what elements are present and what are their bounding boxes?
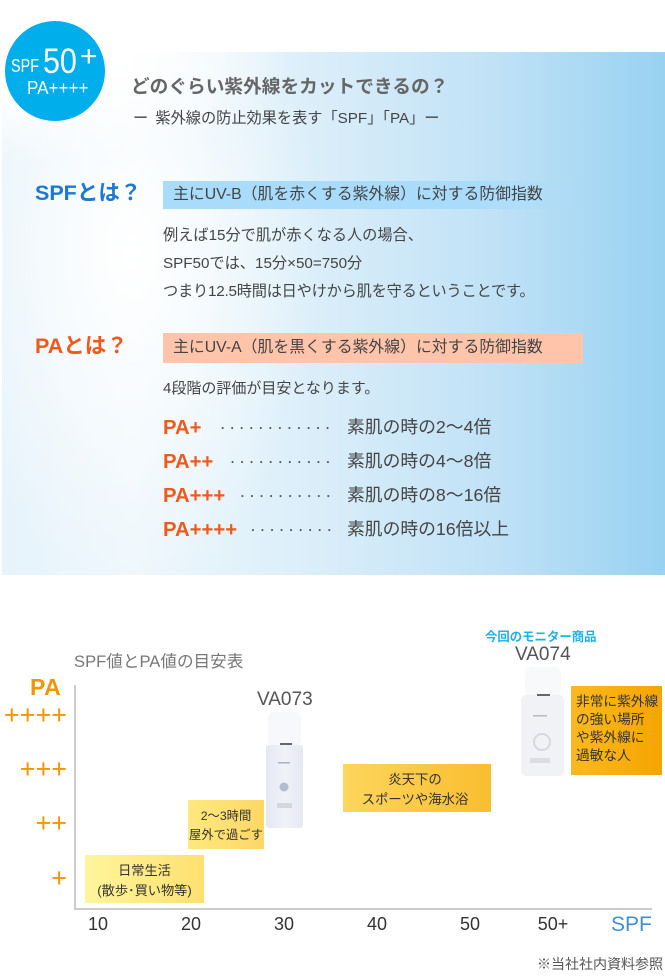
text: SPF explanation: つまり12.5時間は日やけから肌を守るということです。 xyxy=(163,283,534,300)
band: PA definition: 主にUV-A（肌を黒くする紫外線）に対する防御指数 xyxy=(173,339,543,356)
row: PA++ xyxy=(163,451,491,473)
badge: SPF 50+ PA++++: + xyxy=(80,40,98,73)
band: PA definition xyxy=(163,333,583,363)
axis ticks: SPF values: 50+ xyxy=(538,914,568,934)
box: strong UV: や紫外線に xyxy=(576,730,644,745)
box: strong UV xyxy=(571,686,662,775)
box: 2-3 hours outdoors xyxy=(188,800,264,849)
box: daily life: (散歩･買い物等) xyxy=(97,883,192,898)
axis ticks: PA levels: ++ xyxy=(35,808,67,838)
title: どのぐらい紫外線をカットできるの？ xyxy=(131,76,448,97)
axis ticks: PA levels: +++ xyxy=(20,754,67,784)
box: 2-3 hours outdoors: 屋外で過ごす xyxy=(189,828,263,842)
box: 2-3 hours outdoors: 2〜3時間 xyxy=(201,809,251,823)
axis ticks: PA levels xyxy=(4,700,67,893)
band: SPF definition xyxy=(163,181,583,209)
box: daily life xyxy=(85,855,204,903)
box: sports and beach: スポーツや海水浴 xyxy=(362,792,468,807)
panel: sky background xyxy=(2,52,665,575)
text: SPF explanation xyxy=(163,226,534,300)
axis ticks: SPF values: 50 xyxy=(460,914,480,934)
text: PA explanation: 4段階の評価が目安となります。 xyxy=(163,380,379,397)
label: VA073: VA073 xyxy=(257,689,313,710)
label: VA074: VA074 xyxy=(515,644,571,665)
badge: SPF 50+ PA++++: SPF xyxy=(11,56,39,76)
subtitle: ー 紫外線の防止効果を表す「SPF」「PA」ー xyxy=(133,110,440,127)
row: PA++++: 素肌の時の16倍以上 xyxy=(347,519,509,539)
band: SPF definition: 主にUV-B（肌を赤くする紫外線）に対する防御指数 xyxy=(173,186,543,203)
badge: SPF 50+ PA++++: PA++++ xyxy=(27,78,88,98)
row: PA++++: ・・・・・・・・・ xyxy=(248,526,334,537)
row: PA+++ xyxy=(163,485,501,507)
axis label: SPF: SPF xyxy=(611,913,652,936)
row: PA+: PA+ xyxy=(163,417,202,439)
box: strong UV: の強い場所 xyxy=(576,712,644,727)
text: SPF explanation: 例えば15分で肌が赤くなる人の場合、 xyxy=(163,227,423,244)
row: PA+++: 素肌の時の8〜16倍 xyxy=(347,485,501,505)
icon: bottle VA074 xyxy=(521,694,564,776)
footnote: ※当社社内資料参照 xyxy=(537,956,663,972)
axis ticks: PA levels: ++++ xyxy=(4,700,67,730)
chart axes xyxy=(74,685,652,910)
row: PA++: PA++ xyxy=(163,451,213,473)
heading: SPF: SPFとは？ xyxy=(35,181,141,205)
row: PA+: ・・・・・・・・・・・・ xyxy=(218,424,332,435)
row: PA++: ・・・・・・・・・・・ xyxy=(228,458,333,469)
row: PA+++: ・・・・・・・・・・ xyxy=(238,492,333,503)
row: PA++++: PA++++ xyxy=(163,519,237,541)
axis ticks: SPF values: 10 xyxy=(88,914,108,934)
badge: SPF 50+ PA++++ xyxy=(5,21,105,121)
axis label: PA: PA xyxy=(30,674,61,700)
icon: bottle VA073 xyxy=(266,743,303,828)
badge: SPF 50+ PA++++: 50 xyxy=(43,42,77,81)
PA rating list xyxy=(163,417,509,541)
axis ticks: SPF values: 40 xyxy=(367,914,387,934)
box: sports and beach xyxy=(343,764,491,812)
box: strong UV: 非常に紫外線 xyxy=(576,694,658,709)
row: PA++++ xyxy=(163,519,509,541)
row: PA+ xyxy=(163,417,491,439)
axis ticks: SPF values: 20 xyxy=(181,914,201,934)
text: SPF explanation: SPF50では、15分×50=750分 xyxy=(163,255,362,272)
label: monitor product: 今回のモニター商品 xyxy=(485,630,597,644)
chart title: SPF値とPA値の目安表 xyxy=(74,652,243,671)
row: PA++: 素肌の時の4〜8倍 xyxy=(347,451,491,471)
box: daily life: 日常生活 xyxy=(118,863,171,878)
heading: PA: PAとは？ xyxy=(35,334,128,358)
axis ticks: PA levels: + xyxy=(51,863,67,893)
row: PA+++: PA+++ xyxy=(163,485,225,507)
axis ticks: SPF values: 30 xyxy=(274,914,294,934)
row: PA+: 素肌の時の2〜4倍 xyxy=(347,417,491,437)
box: strong UV: 過敏な人 xyxy=(576,748,631,763)
box: sports and beach: 炎天下の xyxy=(388,772,442,787)
